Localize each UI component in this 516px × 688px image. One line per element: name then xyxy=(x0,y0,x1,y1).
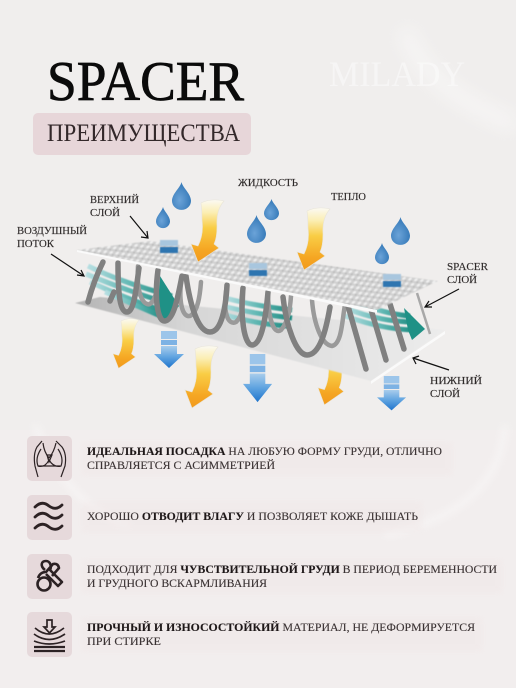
subtitle badge: ПРЕИМУЩЕСТВА xyxy=(47,120,240,147)
arrow to air flow xyxy=(51,254,84,276)
subtitle badge xyxy=(33,113,251,155)
blue arrow center xyxy=(243,354,272,402)
water drop 6 xyxy=(375,243,389,264)
diagram labels xyxy=(17,177,489,400)
heat arrow: top right xyxy=(297,208,330,270)
icon: waves xyxy=(27,495,72,540)
text line 2: СПРАВЛЯЕТСЯ С АСИММЕТРИЕЙ xyxy=(87,458,275,472)
text line 2: И ГРУДНОГО ВСКАРМЛИВАНИЯ xyxy=(87,578,267,590)
heat arrow: below left xyxy=(113,318,139,368)
benefit 4 xyxy=(27,612,475,657)
text line 2: ПРИ СТИРКЕ xyxy=(87,636,161,648)
benefit 2 xyxy=(27,495,418,540)
label: heat: ТЕПЛО xyxy=(331,191,366,203)
air flow arrowhead right xyxy=(404,308,425,340)
label: lower layer xyxy=(430,375,482,400)
arrow to spacer layer xyxy=(425,289,459,307)
label: lower layer: СЛОЙ xyxy=(430,388,460,400)
label: lower layer: НИЖНИЙ xyxy=(430,375,482,387)
label: spacer layer: СЛОЙ xyxy=(447,274,477,286)
air flow middle xyxy=(222,298,292,326)
water drop 1 xyxy=(172,182,191,210)
label: upper layer xyxy=(90,194,139,219)
text: ПРОЧНЫЙ И ИЗНОСОСТОЙКИЙ МАТЕРИАЛ, НЕ ДЕФОРМИРУЕТСЯ xyxy=(87,620,475,634)
icon: compression xyxy=(27,612,72,657)
label: spacer layer xyxy=(447,261,489,286)
benefit 3 xyxy=(27,554,497,599)
benefit 1 xyxy=(27,436,442,481)
moisture chip right xyxy=(383,274,401,287)
arrow to lower layer xyxy=(413,356,449,370)
arrow to upper layer xyxy=(130,216,148,238)
label: spacer layer: SPACER xyxy=(447,261,489,273)
label: air flow: ВОЗДУШНЫЙ xyxy=(17,225,87,237)
water drop 3 xyxy=(247,215,266,243)
water drop 5 xyxy=(391,217,410,245)
label: air flow xyxy=(17,225,87,250)
label: air flow: ПОТОК xyxy=(17,238,55,250)
front spring loops xyxy=(88,262,404,369)
air flow left xyxy=(86,266,172,318)
lower layer xyxy=(75,297,445,381)
upper layer edge xyxy=(77,250,377,313)
heat arrow: below right xyxy=(318,346,348,405)
air flow right xyxy=(345,302,415,330)
text: ИДЕАЛЬНАЯ ПОСАДКА НА ЛЮБУЮ ФОРМУ ГРУДИ, ОТЛИЧНО xyxy=(87,446,442,458)
heat arrow: below center xyxy=(185,346,218,408)
title: SPACER xyxy=(47,51,245,113)
water drop 2 xyxy=(156,207,170,228)
label: liquid: ЖИДКОСТЬ xyxy=(238,177,298,189)
blue arrow right xyxy=(377,376,406,410)
benefit text strips xyxy=(82,443,502,651)
label: upper layer: ВЕРХНИЙ xyxy=(90,194,139,206)
pointer arrows xyxy=(51,216,459,370)
water drop 4 xyxy=(264,199,279,220)
upper layer xyxy=(77,241,438,310)
label: upper layer: СЛОЙ xyxy=(90,207,120,219)
brand watermark: MILADY xyxy=(329,54,465,94)
icon: pacifier xyxy=(27,554,72,599)
moisture chip left xyxy=(160,240,178,253)
diagram: spacer fabric xyxy=(75,182,445,410)
heat arrow: top left xyxy=(191,200,224,262)
feathers xyxy=(35,30,516,535)
moisture chip middle xyxy=(249,263,267,276)
thin rear spring xyxy=(417,293,430,334)
lower layer edge xyxy=(371,331,445,384)
blue arrow left xyxy=(154,331,184,368)
text: ХОРОШО ОТВОДИТ ВЛАГУ И ПОЗВОЛЯЕТ КОЖЕ ДЫШАТЬ xyxy=(87,511,418,523)
air flow arrowhead left xyxy=(158,276,179,323)
text: ПОДХОДИТ ДЛЯ ЧУВСТВИТЕЛЬНОЙ ГРУДИ В ПЕРИОД БЕРЕМЕННОСТИ xyxy=(87,562,497,576)
back spring loops xyxy=(138,266,345,346)
icon: bra xyxy=(27,436,72,481)
